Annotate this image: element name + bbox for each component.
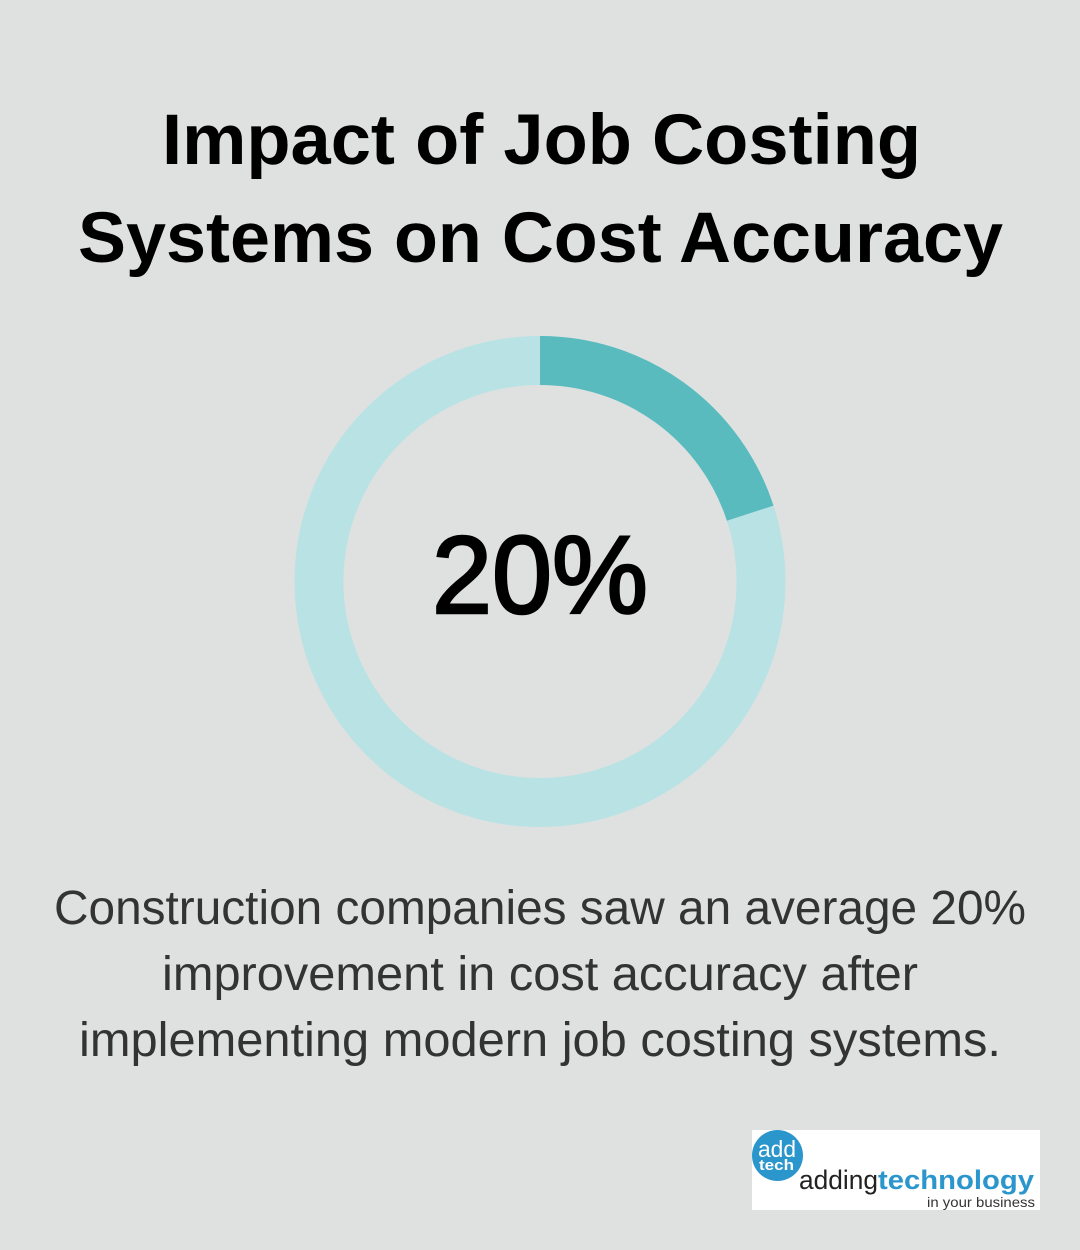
donut 20% segment bbox=[540, 360, 750, 513]
logo badge bbox=[752, 1130, 803, 1181]
center value: 20% bbox=[432, 514, 648, 637]
logo: technology bbox=[878, 1165, 1034, 1195]
description text: improvement in cost accuracy after bbox=[162, 948, 918, 1001]
description text: implementing modern job costing systems. bbox=[79, 1014, 1001, 1067]
description text: Construction companies saw an average 20% bbox=[54, 882, 1026, 935]
title: Systems on Cost Accuracy bbox=[78, 199, 1004, 278]
logo badge text: add bbox=[758, 1136, 796, 1162]
logo tagline: in your business bbox=[927, 1194, 1035, 1210]
title bbox=[78, 101, 1004, 278]
logo badge text bbox=[758, 1136, 796, 1174]
title: Impact of Job Costing bbox=[162, 101, 921, 180]
logo background bbox=[752, 1130, 1040, 1210]
donut chart bbox=[319, 360, 761, 802]
logo badge text: tech bbox=[759, 1157, 794, 1174]
logo wordmark: adding bbox=[799, 1165, 878, 1195]
description text bbox=[54, 882, 1026, 1067]
logo bbox=[752, 1130, 1040, 1210]
donut track bbox=[319, 360, 761, 802]
